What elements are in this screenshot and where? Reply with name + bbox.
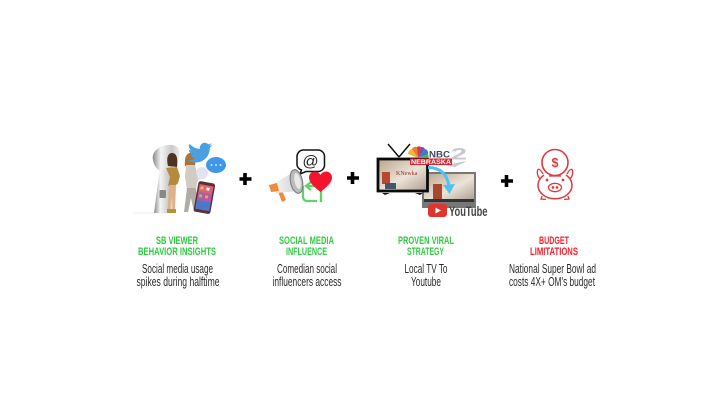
heading: LIMITATIONS xyxy=(530,246,578,258)
body: Local TV To xyxy=(404,262,448,276)
icon: TV antenna xyxy=(388,144,410,157)
icon: second video screen xyxy=(422,172,476,208)
body: Social media usage xyxy=(142,262,213,276)
icon: megaphone xyxy=(269,169,305,202)
icon: at-sign speech bubble: @ xyxy=(302,154,319,170)
text block: SB viewer behavior insights xyxy=(136,235,220,289)
icon: Twitter bird xyxy=(188,143,212,162)
body xyxy=(404,262,448,289)
heading xyxy=(530,235,578,258)
body: National Super Bowl ad xyxy=(509,262,596,276)
body: Youtube xyxy=(411,275,441,289)
icon: blue curved arrow xyxy=(428,168,455,194)
body: costs 4X+ OM's budget xyxy=(509,275,595,289)
text block: social media influence xyxy=(272,235,342,289)
performer in gold xyxy=(166,153,180,213)
icon: piggy bank with dollar coin xyxy=(537,150,573,200)
icon: NBC Nebraska logo xyxy=(408,144,467,167)
body xyxy=(136,262,220,289)
pig body xyxy=(537,169,573,200)
body: Comedian social xyxy=(277,262,337,276)
body xyxy=(272,262,342,289)
icon: Super Bowl trophy, performers, social media xyxy=(133,143,226,214)
icon: blue chat bubble xyxy=(206,157,226,173)
icon: NBC Nebraska logo: 2 xyxy=(451,144,467,164)
heading: SOCIAL MEDIA xyxy=(279,235,334,247)
heading: STRATEGY xyxy=(407,246,444,258)
coin: $ xyxy=(552,156,559,170)
heading: BEHAVIOR INSIGHTS xyxy=(138,246,216,258)
body: influencers access xyxy=(272,275,342,289)
icon: pale chat bubble xyxy=(196,167,208,180)
text block: proven viral strategy xyxy=(398,235,454,289)
heading: SB VIEWER xyxy=(156,235,198,247)
heading: PROVEN VIRAL xyxy=(398,235,454,247)
body xyxy=(509,262,596,289)
icon: television with video still: KNewka xyxy=(396,171,418,177)
icon: smartphone xyxy=(193,181,215,214)
body: spikes during halftime xyxy=(136,275,220,289)
performer in silver xyxy=(184,153,198,212)
plus sign 3 xyxy=(501,175,513,187)
icon: local TV to YouTube xyxy=(378,144,488,219)
plus sign 2 xyxy=(347,172,359,184)
icon: red heart xyxy=(309,172,332,192)
heading: BUDGET xyxy=(539,235,569,247)
heading xyxy=(279,235,334,258)
plus sign 1 xyxy=(240,173,252,185)
icon: NBC Nebraska logo: NEBRASKA xyxy=(411,159,451,166)
icon: NBC Nebraska logo: NBC xyxy=(429,150,450,160)
trophy xyxy=(133,145,180,214)
heading xyxy=(138,235,216,258)
icon: social media influence xyxy=(269,150,332,202)
text block: budget limitations xyxy=(509,235,596,289)
icon: YouTube logo: YouTube xyxy=(449,203,488,219)
heading: INFLUENCE xyxy=(286,246,327,258)
heading xyxy=(398,235,454,258)
icon: green repost arrows xyxy=(303,182,321,202)
